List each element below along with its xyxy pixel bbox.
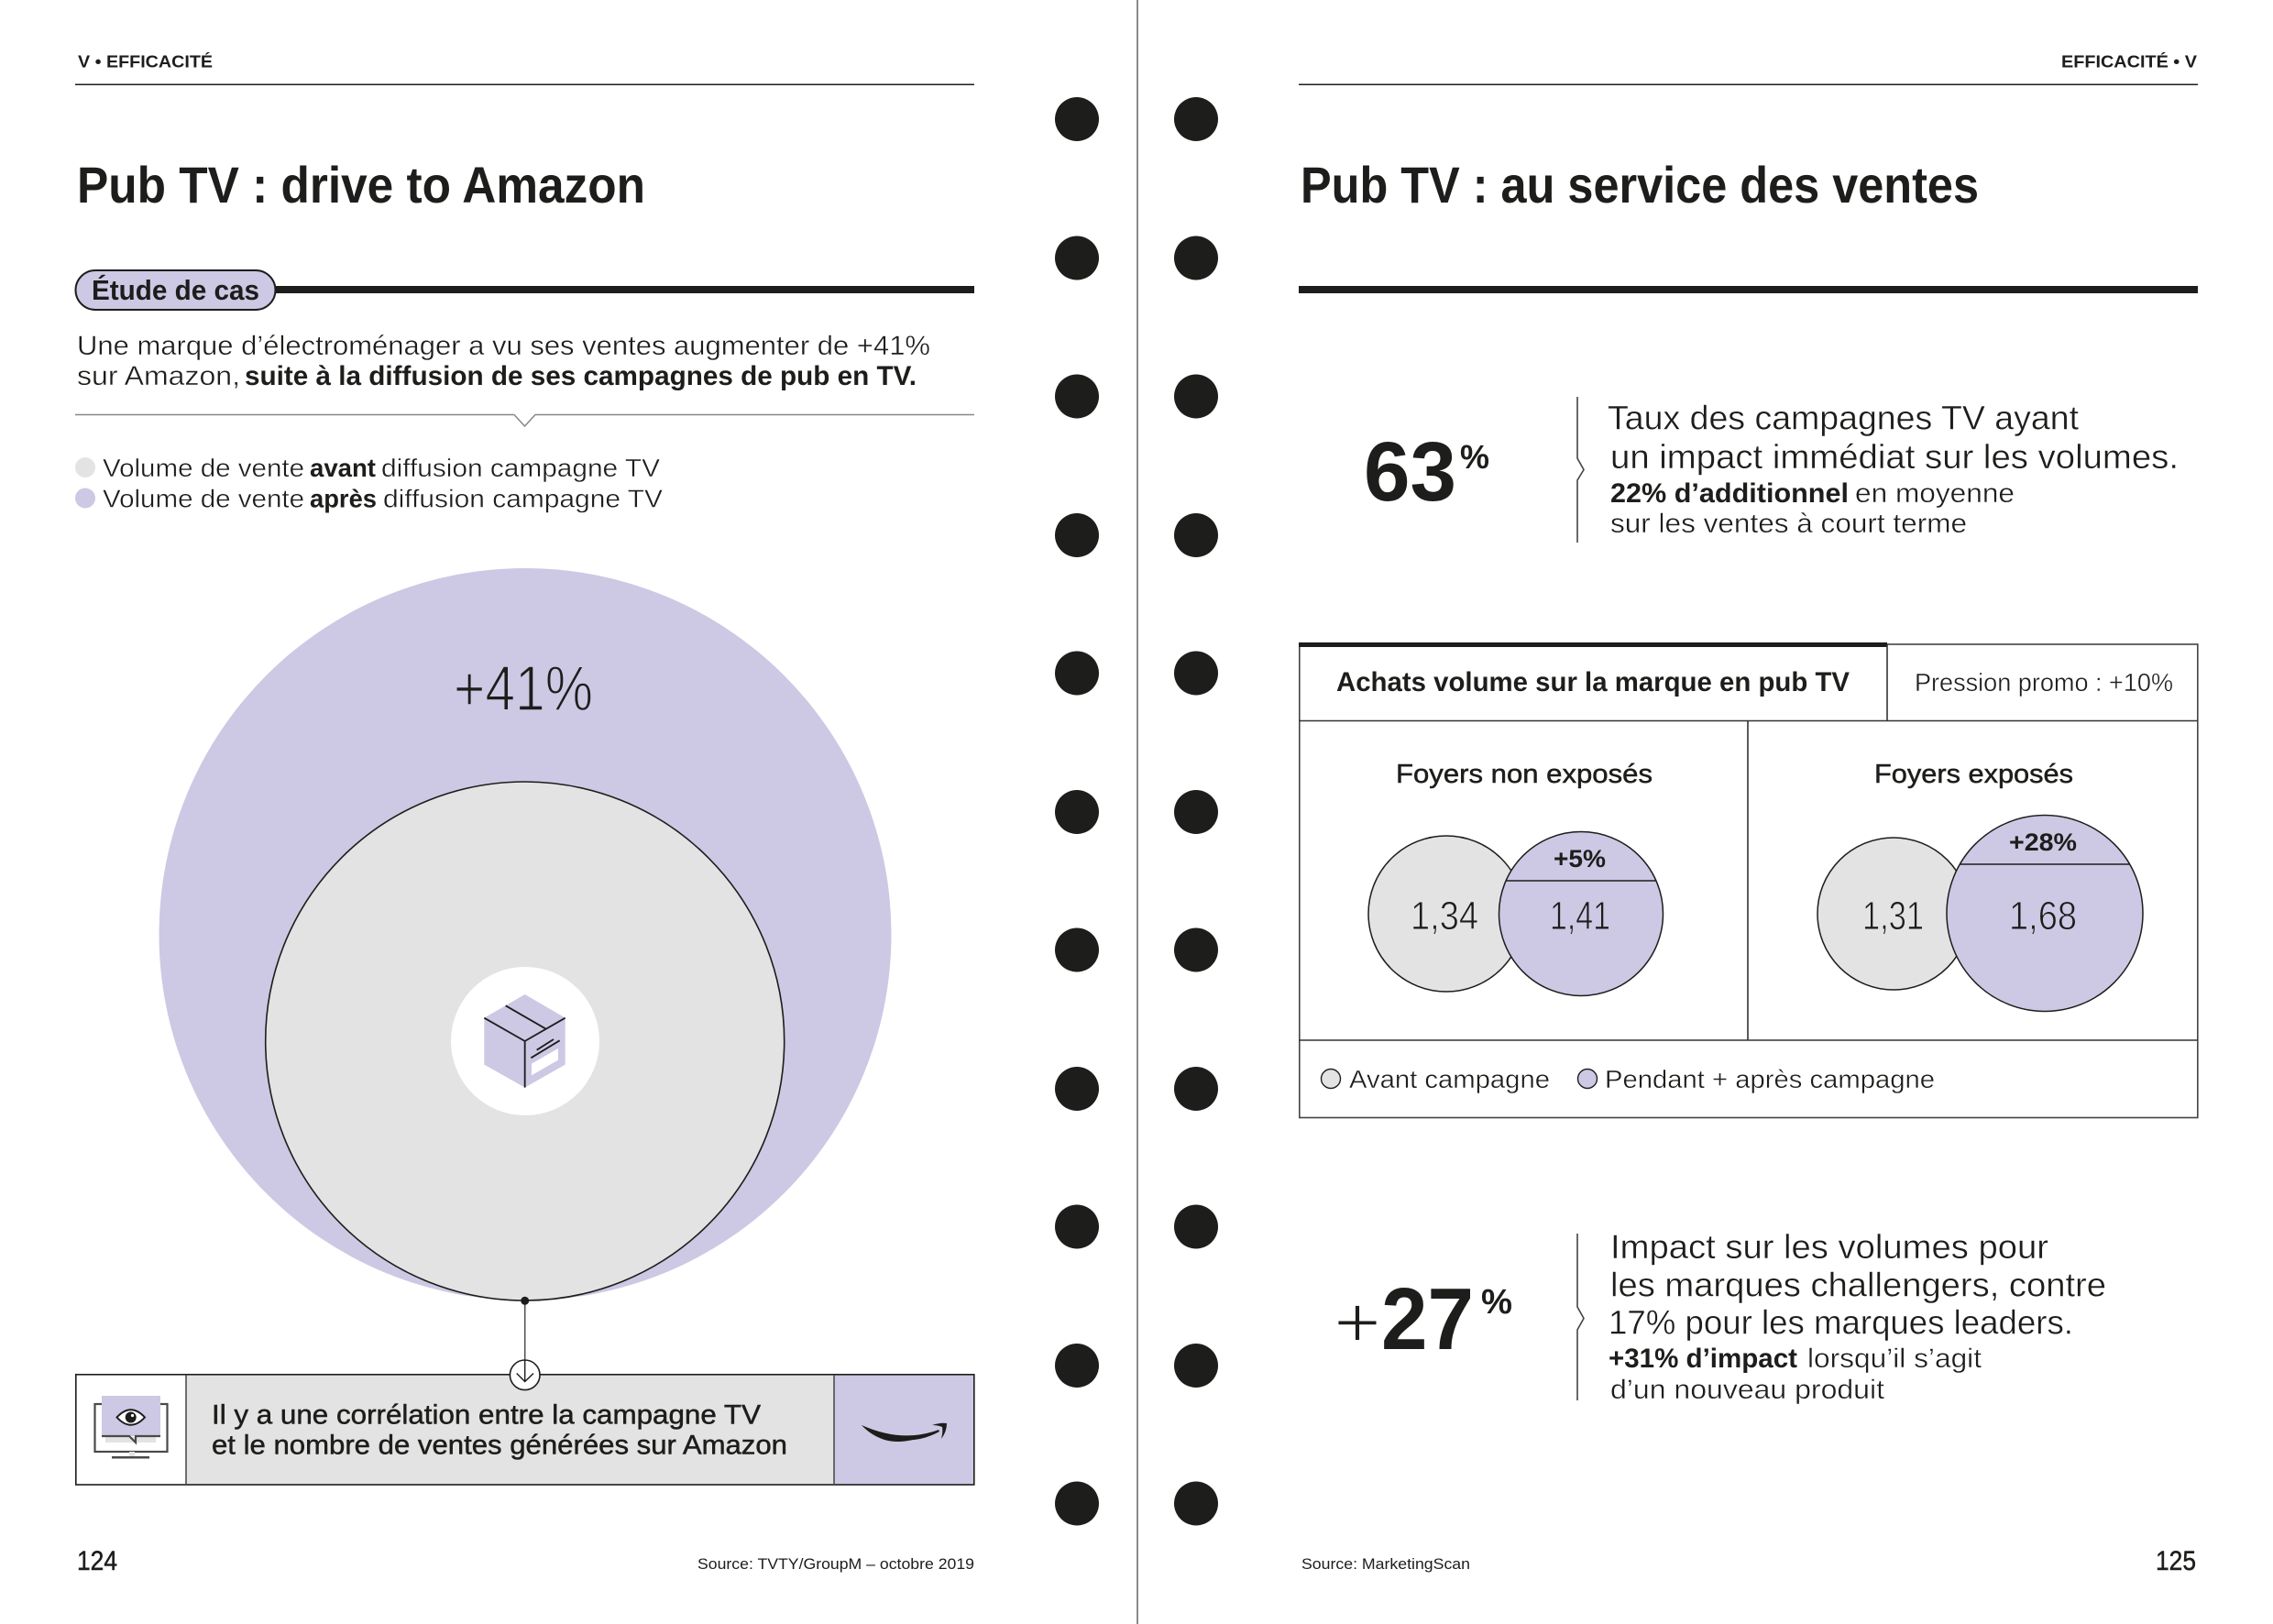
stat text: Impact sur les volumes pour [1610, 1228, 2048, 1266]
stat 63: 63 [1364, 425, 1456, 519]
stat text: 17% pour les marques leaders. [1609, 1303, 2073, 1342]
bracket [1577, 397, 1584, 543]
stat +27: 27 [1381, 1270, 1474, 1368]
stat block: +27% [1334, 1228, 2106, 1405]
stat text: sur les ventes à court terme [1610, 509, 1967, 539]
callout text [212, 1400, 787, 1461]
cell: non-exposed households: 1,41 [1550, 894, 1610, 938]
stat text: +31% d’impact [1609, 1344, 1797, 1374]
promo pressure: Pression promo : +10% [1915, 668, 2173, 697]
table header: Achats volume sur la marque en pub TV [1336, 667, 1850, 697]
legend left: diffusion campagne TV [383, 484, 663, 513]
proportional circles chart [159, 568, 891, 1300]
page number 124: 124 [77, 1546, 117, 1576]
cell: non-exposed households [1368, 760, 1663, 995]
legend left: Volume de vente [103, 454, 304, 482]
intro text: sur Amazon, [77, 361, 240, 391]
case study pill: Étude de cas [92, 274, 259, 306]
stat text: en moyenne [1855, 478, 2015, 509]
stat text: les marques challengers, contre [1610, 1267, 2106, 1303]
stat +27: + [1334, 1281, 1381, 1363]
icon: amazon smile [862, 1423, 947, 1442]
running header right: EFFICACITÉ • V [2061, 51, 2197, 71]
stat text: 22% d’additionnel [1610, 478, 1849, 509]
legend left [75, 454, 663, 513]
legend left: Volume de vente [103, 484, 304, 513]
legend left: diffusion campagne TV [381, 454, 660, 482]
cell: exposed households: Foyers exposés [1874, 760, 2073, 789]
stat block: 63% [1364, 397, 2179, 543]
icon: box [451, 967, 599, 1115]
legend right: Avant campagne [1349, 1065, 1550, 1093]
stat +27: % [1481, 1283, 1512, 1322]
legend right: Pendant + après campagne [1605, 1065, 1935, 1093]
stat text: d’un nouveau produit [1610, 1375, 1885, 1405]
running header left: V • EFFICACITÉ [78, 51, 213, 71]
cell: non-exposed households: 1,34 [1411, 894, 1478, 938]
cell: non-exposed households: Foyers non exposés [1396, 760, 1653, 789]
connector arrow [510, 1297, 540, 1390]
table: purchase volumes [1299, 642, 2198, 1118]
legend right [1322, 1065, 1935, 1093]
panel: right page [1299, 51, 2198, 1576]
stat text: lorsqu’il s’agit [1807, 1344, 1982, 1374]
intro text: suite à la diffusion de ses campagnes de pub en TV. [245, 361, 917, 391]
cell: exposed households [1817, 760, 2143, 1012]
cell: exposed households: 1,68 [2009, 894, 2077, 938]
stat text [1608, 400, 2179, 539]
bracket [1577, 1234, 1584, 1400]
panel: left page [75, 51, 974, 1576]
title left: Pub TV : drive to Amazon [77, 156, 645, 214]
icon: monitor with eye [95, 1396, 167, 1459]
cell: exposed households: 1,31 [1862, 894, 1924, 938]
title right: Pub TV : au service des ventes [1301, 156, 1979, 214]
source right: Source: MarketingScan [1301, 1555, 1470, 1573]
callout text: Il y a une corrélation entre la campagne TV [212, 1400, 761, 1430]
source left: Source: TVTY/GroupM – octobre 2019 [697, 1555, 974, 1573]
page number 125: 125 [2156, 1546, 2196, 1576]
stat 63: % [1460, 438, 1489, 476]
stat text: Taux des campagnes TV ayant [1608, 400, 2080, 436]
cell: exposed households: +28% [2009, 828, 2077, 856]
before-campaign circle [266, 782, 785, 1300]
callout box [76, 1375, 974, 1485]
legend left: après [310, 484, 377, 513]
stat text [1609, 1228, 2106, 1405]
intro text [77, 331, 930, 391]
legend left: avant [310, 454, 376, 482]
divider with notch [75, 414, 974, 426]
binding holes [1055, 97, 1218, 1525]
stat +27 [1334, 1270, 1512, 1368]
label +41%: +41% [454, 653, 593, 724]
callout text: et le nombre de ventes générées sur Amazon [212, 1430, 787, 1461]
cell: non-exposed households: +5% [1554, 845, 1606, 872]
intro text: Une marque d’électroménager a vu ses ventes augmenter de +41% [77, 331, 930, 361]
stat text: un impact immédiat sur les volumes. [1610, 438, 2179, 476]
after-campaign circle [159, 568, 891, 1300]
